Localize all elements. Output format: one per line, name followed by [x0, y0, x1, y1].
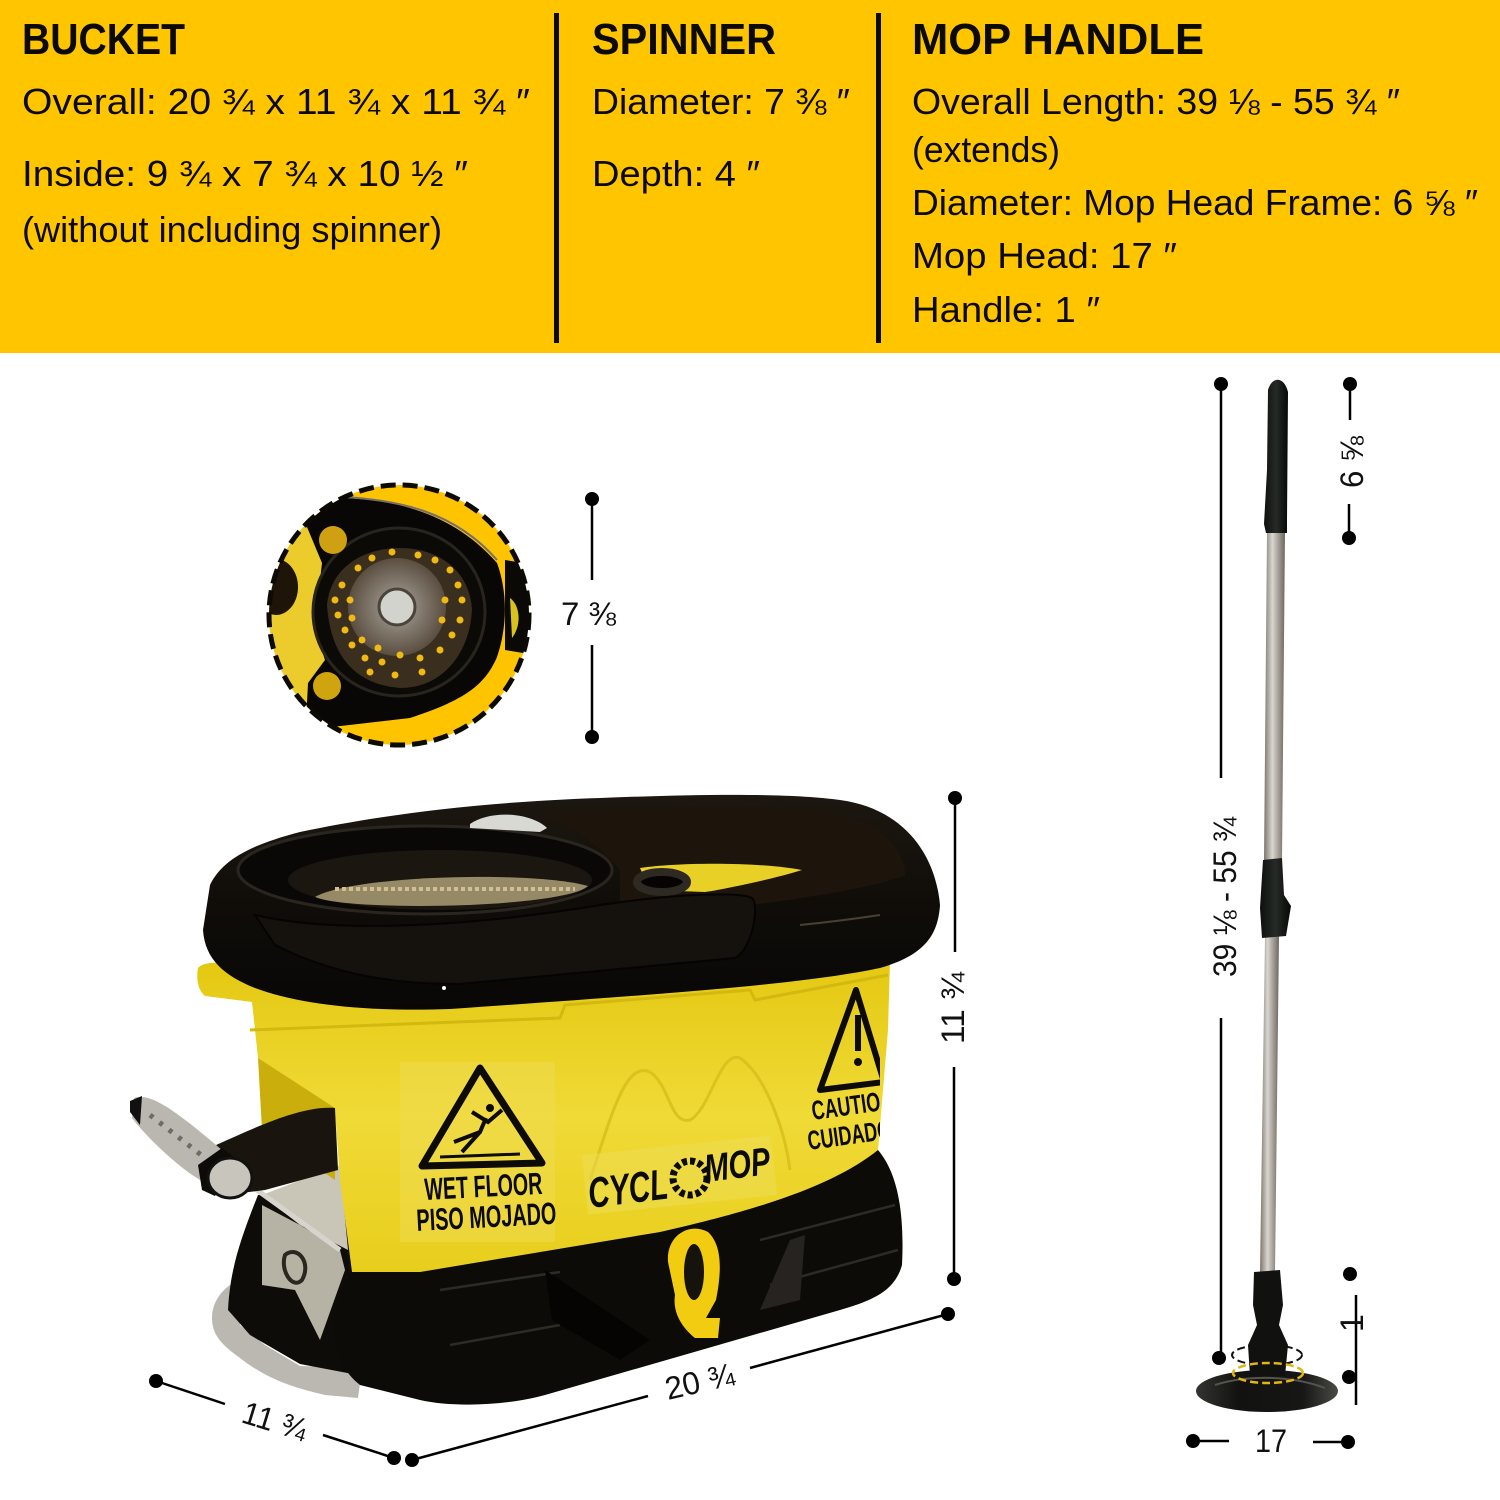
header band	[0, 0, 1500, 353]
wringer lever	[130, 1096, 338, 1198]
caution sign: CAUTION	[810, 1085, 895, 1126]
lower pole	[1260, 936, 1279, 1272]
bucket overall size: Overall: 20 ¾ x 11 ¾ x 11 ¾ ″	[22, 81, 530, 122]
handle grip	[1264, 380, 1288, 533]
bucket length dimension: 20 ¾	[661, 1356, 739, 1407]
front handle	[255, 894, 755, 984]
heading: bucket: BUCKET	[22, 15, 185, 64]
handle diameter dimension	[1334, 1267, 1370, 1405]
mop length dimension	[1207, 377, 1243, 1365]
bucket height dimension	[935, 791, 971, 1286]
cyclomop logo	[582, 1135, 777, 1218]
cyclomop logo: CYCL	[585, 1161, 671, 1218]
caution sign: CUIDADO	[806, 1115, 893, 1156]
handle overall length: Overall Length: 39 ⅛ - 55 ¾ ″	[912, 81, 1400, 122]
mop head frame diameter: Diameter: Mop Head Frame: 6 ⅝ ″	[912, 182, 1478, 223]
panel: mop handle dimensions	[912, 15, 1478, 330]
spinner diameter: Diameter: 7 ⅜ ″	[592, 81, 850, 122]
mop length dimension: 39 ⅛ - 55 ¾	[1207, 816, 1243, 977]
grip length dimension	[1334, 377, 1370, 545]
spinner diameter dimension: 7 ⅜	[561, 596, 616, 632]
telescoping connector	[1260, 858, 1291, 938]
upper pole	[1264, 532, 1285, 860]
mop head width dimension: 17	[1255, 1423, 1287, 1459]
rim	[203, 795, 940, 1010]
wet floor sign: WET FLOOR	[424, 1166, 543, 1207]
bucket width dimension: 11 ¾	[238, 1394, 313, 1448]
bucket inside size: Inside: 9 ¾ x 7 ¾ x 10 ½ ″	[22, 153, 468, 194]
right opening	[540, 807, 905, 905]
wet floor sign: PISO MOJADO	[416, 1196, 557, 1238]
wet floor sign	[400, 1062, 557, 1242]
bucket length dimension	[405, 1307, 955, 1467]
bucket height dimension: 11 ¾	[935, 971, 971, 1044]
caution sign	[808, 987, 880, 1150]
handle diameter: Handle: 1 ″	[912, 289, 1100, 330]
spinner diameter dimension	[561, 492, 616, 744]
mop head	[1196, 1270, 1338, 1412]
mop product illustration	[1196, 380, 1338, 1412]
handle diameter dimension: 1	[1334, 1314, 1370, 1332]
cyclomop logo: MOP	[702, 1140, 773, 1191]
heading: spinner: SPINNER	[592, 15, 776, 64]
spinner depth: Depth: 4 ″	[592, 153, 760, 194]
extends note: (extends)	[912, 129, 1060, 170]
spinner close-up circle	[254, 485, 535, 745]
bucket note: (without including spinner)	[22, 209, 442, 250]
grip length dimension: 6 ⅝	[1334, 436, 1370, 488]
base	[334, 1150, 903, 1405]
bucket width dimension	[149, 1374, 401, 1465]
panel: spinner dimensions	[592, 15, 850, 194]
panel: bucket dimensions	[22, 15, 530, 250]
spinner ring	[238, 826, 612, 914]
pedal	[212, 1165, 362, 1398]
drain plug	[668, 1229, 720, 1338]
bucket product illustration	[130, 795, 940, 1405]
mop head size: Mop Head: 17 ″	[912, 235, 1177, 276]
heading: mop handle: MOP HANDLE	[912, 15, 1204, 64]
mop head width dimension	[1186, 1423, 1355, 1459]
bucket body	[197, 960, 890, 1272]
embossed arches	[590, 1057, 790, 1180]
